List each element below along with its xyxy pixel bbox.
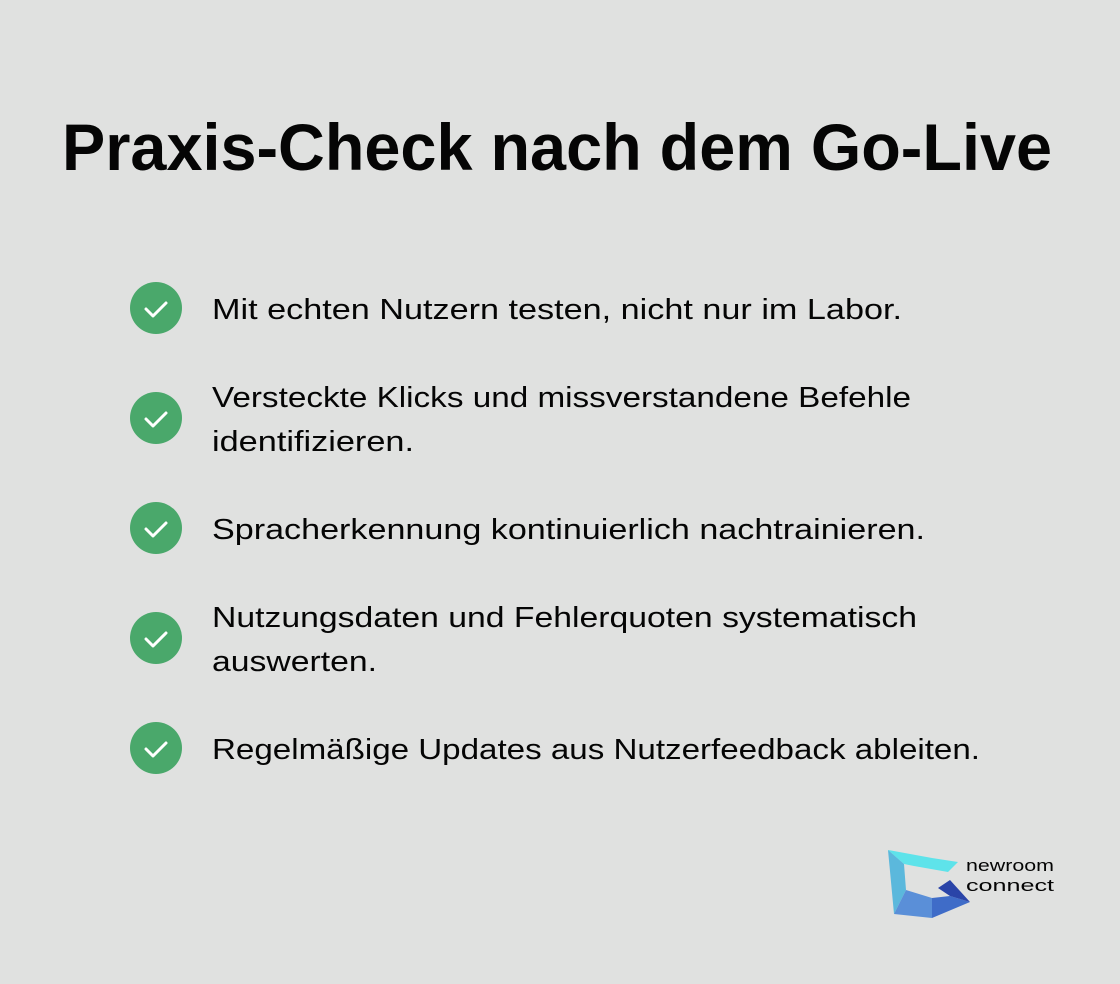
logo <box>888 850 1054 918</box>
icon: check 4 <box>130 612 182 664</box>
item 2: identifizieren. <box>212 426 414 458</box>
item 2: Versteckte Klicks und missverstandene Befehle <box>212 382 911 414</box>
icon: check 5 <box>130 722 182 774</box>
item 1 <box>130 282 902 334</box>
item 4: auswerten. <box>212 646 377 678</box>
item 3: Spracherkennung kontinuierlich nachtrainieren. <box>212 514 925 546</box>
icon: check 3 <box>130 502 182 554</box>
item 4: Nutzungsdaten und Fehlerquoten systematisch <box>212 602 917 634</box>
logo: newroom <box>966 856 1054 875</box>
item 5: Regelmäßige Updates aus Nutzerfeedback ableiten. <box>212 734 980 766</box>
item 3 <box>130 502 925 554</box>
item 4 <box>130 602 917 678</box>
logo: connect <box>966 876 1054 895</box>
item 1: Mit echten Nutzern testen, nicht nur im Labor. <box>212 294 902 326</box>
item 5 <box>130 722 980 774</box>
icon: check 1 <box>130 282 182 334</box>
icon: check 2 <box>130 392 182 444</box>
item 2 <box>130 382 911 458</box>
title: Praxis-Check nach dem Go-Live <box>62 110 1052 184</box>
